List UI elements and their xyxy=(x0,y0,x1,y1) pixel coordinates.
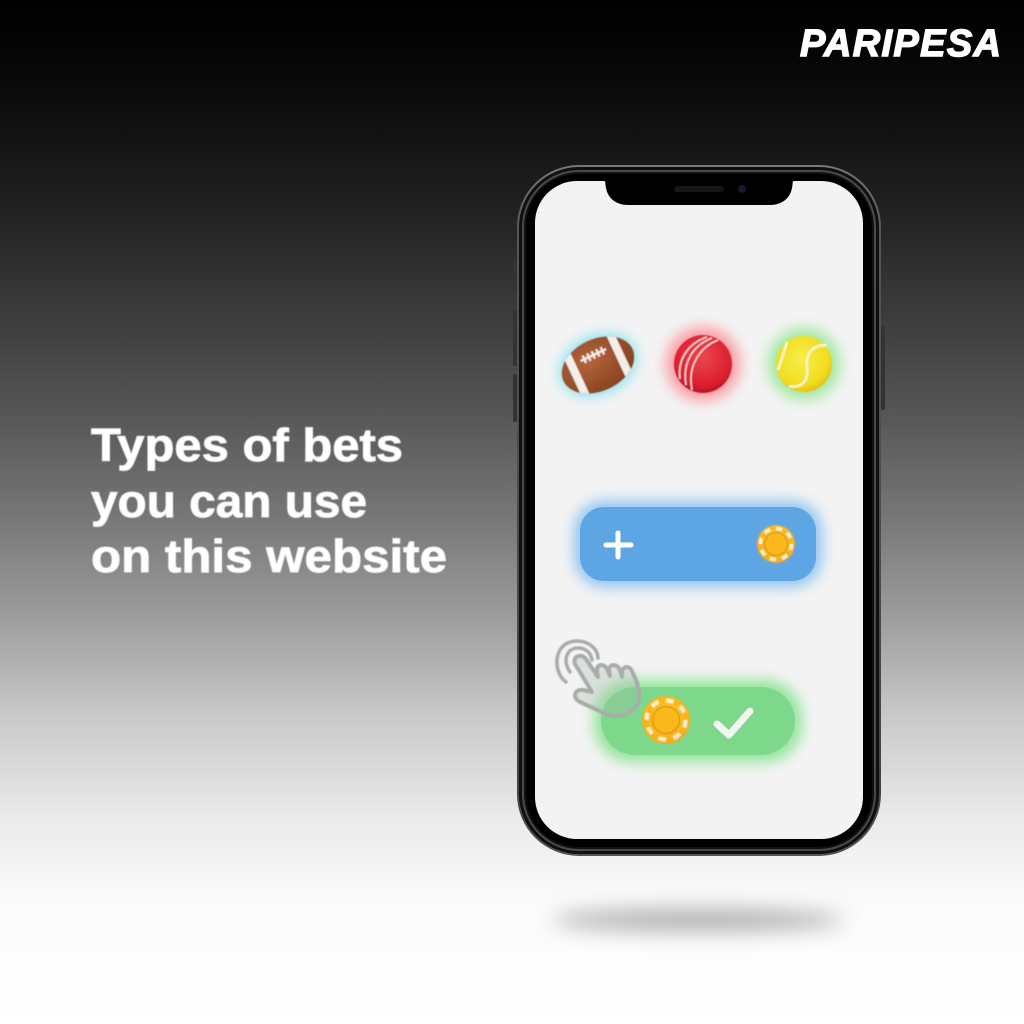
camera xyxy=(738,185,746,193)
icon: check mark xyxy=(717,711,750,735)
phone floor shadow xyxy=(552,909,844,931)
icon: tennis ball xyxy=(768,328,840,400)
icon: chip xyxy=(757,525,795,563)
speaker xyxy=(674,186,724,192)
title: Types of bets xyxy=(91,419,403,471)
icon: tapping hand xyxy=(557,641,640,716)
icon: plus xyxy=(606,533,631,557)
screen xyxy=(535,181,863,839)
title: you can use xyxy=(91,475,367,527)
panel: blue stake button xyxy=(574,501,822,587)
panel: green confirm button xyxy=(594,680,802,762)
icon: american football xyxy=(551,322,645,408)
title xyxy=(91,419,447,582)
side buttons xyxy=(513,260,885,422)
logo: PARIPESA: PARIPESA xyxy=(800,23,1001,65)
icon: cricket ball xyxy=(666,327,740,401)
title: on this website xyxy=(91,530,447,582)
phone frame xyxy=(517,165,881,856)
notch xyxy=(604,181,794,205)
phone xyxy=(513,165,885,856)
icon: chip xyxy=(642,696,690,744)
